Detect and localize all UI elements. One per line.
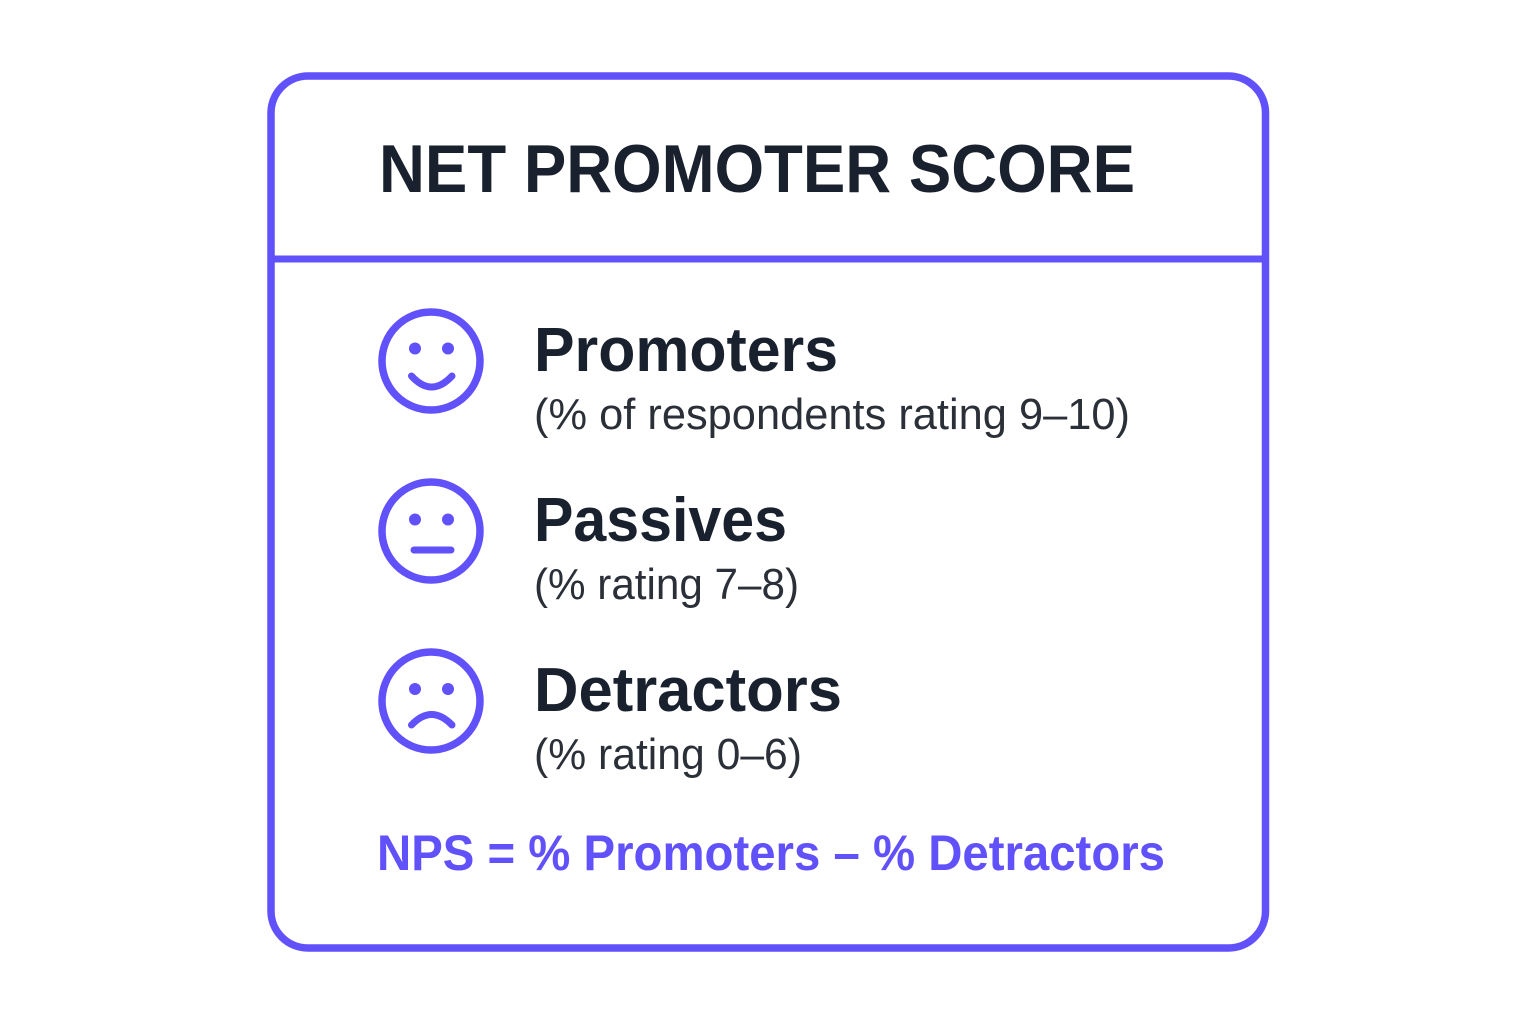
panel: NPS card [271, 76, 1266, 948]
icon: smiling face [382, 312, 480, 410]
heading: Promoters: Promoters [534, 316, 838, 385]
icon: frowning face [382, 652, 480, 750]
text: promoters description: (% of respondents rating 9–10) [534, 390, 1130, 439]
text: passives description: (% rating 7–8) [534, 560, 799, 609]
text: detractors description: (% rating 0–6) [534, 730, 802, 779]
formula: NPS = % Promoters – % Detractors [377, 825, 1165, 881]
title: NET PROMOTER SCORE [379, 131, 1135, 207]
heading: Detractors: Detractors [534, 656, 842, 725]
icon: neutral face [382, 482, 480, 580]
heading: Passives: Passives [534, 486, 787, 555]
